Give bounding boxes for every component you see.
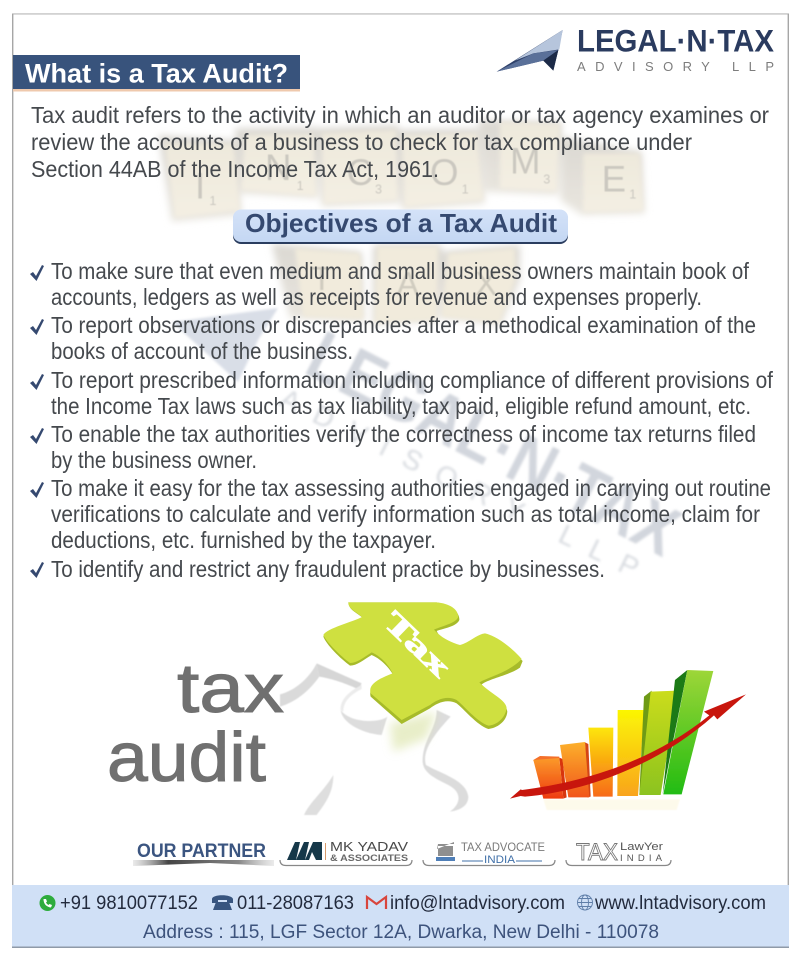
logo: Legal-N-Tax Advisory LLP (497, 22, 774, 74)
partner: Tax Lawyer India: TAX (576, 839, 618, 866)
partner: Tax Lawyer India (566, 839, 671, 866)
bullet 4 (30, 421, 756, 473)
text block: definition: review the accounts of a business to check for tax compliance under (31, 129, 692, 155)
watermark: INCOME scrabble tiles: 3 (543, 172, 550, 186)
bullet 2: books of account of the business. (51, 338, 353, 364)
watermark: rotated logo (172, 308, 692, 584)
illustration: green Tax puzzle piece: Tax (377, 605, 457, 684)
watermark: INCOME scrabble tiles: E (602, 159, 626, 200)
partner: Tax Advocate India: INDIA (484, 854, 516, 866)
contact: phone: +91 9810077152 (60, 893, 198, 914)
text block: definition: Section 44AB of the Income Tax Act, 1961. (31, 156, 439, 182)
watermark: INCOME scrabble tiles: 3 (375, 182, 382, 196)
partner: MK Yadav (280, 840, 412, 866)
watermark: TAX scrabble tiles: X (475, 266, 497, 303)
reflection (543, 799, 680, 810)
bar 2 (560, 742, 591, 797)
partner: MK Yadav: MK YADAV (330, 840, 409, 854)
illustration: tax audit wordmark (107, 649, 284, 796)
logo: Legal-N-Tax Advisory LLP: LEGAL·N·TAX (577, 22, 774, 58)
partner: Tax Advocate India: TAX ADVOCATE (461, 842, 545, 854)
partner: Tax Lawyer India: INDIA (620, 853, 663, 864)
bar 4 (617, 710, 644, 796)
chart: rising coloured bars with arrow (510, 670, 746, 810)
icon: globe (578, 895, 592, 910)
arrow (510, 694, 746, 799)
contact: email: info@lntadvisory.com (390, 893, 565, 914)
partner: MK Yadav: & ASSOCIATES (330, 853, 408, 863)
illustration: tax audit wordmark: tax (177, 649, 284, 727)
list: objectives (30, 258, 774, 582)
watermark: TAX scrabble tiles: T (312, 261, 332, 298)
heading: Objectives of a Tax Audit: Objectives of a Tax Audit (245, 208, 557, 238)
watermark: INCOME scrabble tiles: I (195, 165, 205, 206)
watermark: rotated logo: ADVISORY LLP (275, 383, 644, 584)
bullet 5: deductions, etc. furnished by the taxpayer. (51, 527, 436, 553)
icon: telephone (212, 895, 233, 910)
footer: contact band (12, 885, 789, 948)
bar 6 (663, 670, 713, 794)
bar 5 (639, 691, 677, 795)
watermark: INCOME scrabble tiles: C (347, 152, 373, 193)
partner: Tax Lawyer India: LawYer (620, 841, 663, 853)
illustration: tax audit wordmark: audit (107, 718, 266, 796)
logo: Legal-N-Tax Advisory LLP: ADVISORY LLP (577, 59, 774, 74)
icon: logo paper plane (497, 30, 563, 72)
illustration: green Tax puzzle piece (323, 602, 523, 729)
partners row (133, 839, 671, 866)
illustration: white puzzle slot (280, 663, 468, 815)
text block: definition: Tax audit refers to the activity in which an auditor or tax agency examines or (31, 102, 769, 128)
icon: mail (367, 897, 386, 909)
bullet 6: To identify and restrict any fraudulent practice by businesses. (51, 556, 605, 582)
label: our partner: OUR PARTNER (137, 841, 266, 862)
watermark: TAX scrabble tiles: A (397, 266, 420, 303)
bullet 1 (30, 258, 750, 310)
text block: definition (31, 102, 769, 182)
contact: landline: 011-28087163 (237, 893, 354, 914)
bar 3 (588, 728, 613, 797)
contact: website: www.lntadvisory.com (594, 893, 766, 914)
watermark: INCOME scrabble tiles: 1 (629, 187, 636, 201)
watermark: INCOME scrabble tiles: 1 (209, 194, 216, 208)
watermark: INCOME scrabble tiles: M (510, 140, 541, 181)
watermark: rotated logo: LEGAL·N·TAX (295, 316, 692, 571)
bullet 3 (30, 367, 774, 419)
contact: address: Address : 115, LGF Sector 12A, Dwarka, New Delhi - 110078 (143, 922, 659, 943)
bullet 1: accounts, ledgers as well as receipts for revenue and expenses properly. (51, 284, 702, 310)
watermark: INCOME scrabble tiles: O (430, 152, 458, 193)
bar 1 (533, 756, 567, 799)
heading: What is a Tax Audit?: What is a Tax Audit? (25, 58, 288, 88)
watermark: INCOME scrabble tiles (158, 120, 645, 222)
partner: Tax Advocate India (423, 842, 555, 866)
bullet 2 (30, 312, 756, 364)
icon: whatsapp (40, 895, 56, 911)
watermark: TAX scrabble tiles (272, 243, 520, 325)
bullet 5 (30, 475, 771, 553)
watermark: INCOME scrabble tiles: 1 (297, 179, 304, 193)
watermark: INCOME scrabble tiles: 1 (462, 182, 469, 196)
bullet 4: by the business owner. (51, 447, 257, 473)
watermark: INCOME scrabble tiles: N (265, 147, 291, 188)
